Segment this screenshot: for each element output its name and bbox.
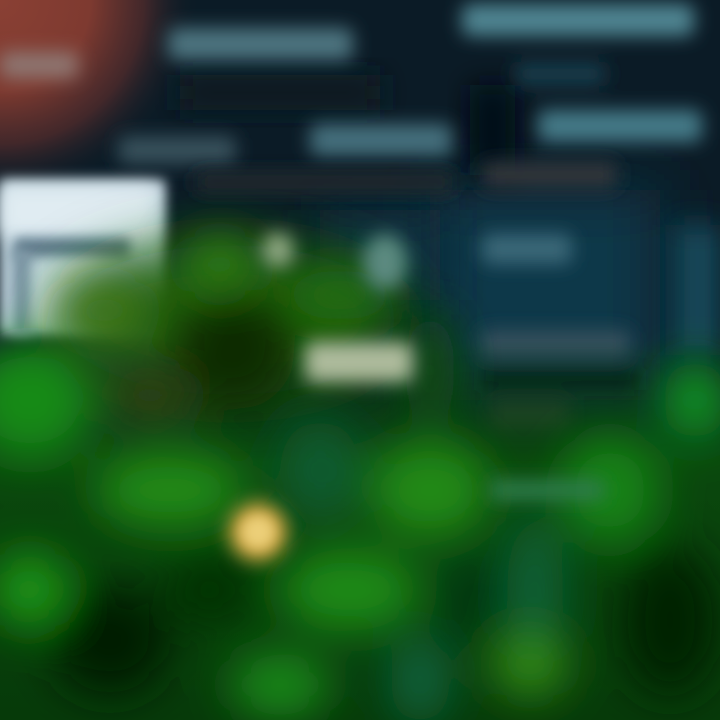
white building block [0,180,165,335]
window bars: upper row [0,4,702,164]
foliage: leaf clusters [0,235,720,720]
pale highlights among leaves [262,232,605,500]
glowing yellow light [228,502,288,562]
foliage: base layer [0,245,720,720]
red brick corner [0,0,200,200]
window bars: dim middle and lower rows [195,162,640,432]
